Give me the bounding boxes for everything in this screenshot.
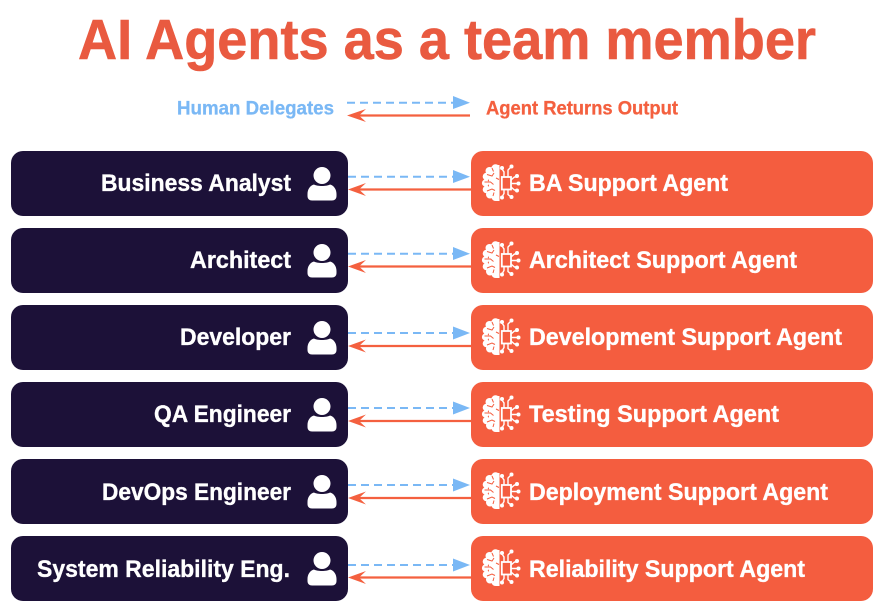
legend label: human delegates: Human Delegates — [177, 98, 334, 120]
icon: person — [308, 552, 336, 586]
legend arrow: delegate — [347, 96, 470, 109]
icon: person — [308, 244, 336, 278]
icon: person — [308, 475, 336, 508]
arrow: return — [348, 183, 471, 196]
row: devops engineer — [11, 459, 873, 524]
icon: AI brain — [482, 164, 520, 201]
arrow: return — [348, 260, 471, 273]
agent card: BA Support Agent — [529, 170, 728, 197]
row: business analyst — [11, 151, 873, 216]
arrow: return — [348, 571, 471, 584]
icon: person — [308, 167, 336, 200]
icon: person — [308, 321, 336, 354]
icon: AI brain — [482, 549, 520, 586]
row: architect — [11, 228, 873, 293]
arrow: return — [348, 492, 471, 504]
human card — [11, 151, 348, 216]
agent card: Reliability Support Agent — [529, 556, 805, 583]
arrow: delegate — [348, 402, 470, 414]
title: AI Agents as a team member — [78, 8, 816, 72]
icon: person — [308, 398, 336, 432]
human card — [11, 459, 348, 524]
human card — [11, 228, 348, 293]
human card: Business Analyst — [101, 170, 291, 197]
human card: Architect — [190, 247, 291, 274]
agent card — [471, 459, 873, 524]
human card — [11, 382, 348, 447]
agent card — [471, 228, 873, 293]
arrow: delegate — [348, 170, 470, 183]
legend arrow: return — [347, 109, 470, 122]
human card — [11, 536, 348, 601]
agent card: Testing Support Agent — [529, 401, 779, 428]
icon: AI brain — [482, 472, 520, 509]
agent card: Development Support Agent — [529, 324, 842, 351]
arrow: delegate — [348, 478, 470, 492]
row: developer — [11, 305, 873, 370]
human card: Developer — [180, 324, 291, 351]
agent card: Architect Support Agent — [529, 247, 797, 274]
legend label: agent returns output: Agent Returns Output — [486, 98, 678, 120]
icon: AI brain — [482, 241, 520, 278]
legend — [177, 96, 678, 122]
human card: System Reliability Eng. — [37, 556, 290, 583]
arrow: return — [348, 414, 471, 428]
icon: AI brain — [482, 318, 520, 355]
arrow: delegate — [348, 558, 470, 572]
human card: DevOps Engineer — [102, 479, 291, 506]
arrow: delegate — [348, 247, 470, 260]
arrow: return — [348, 340, 471, 352]
agent card — [471, 382, 873, 447]
row: system reliability engineer — [11, 536, 873, 601]
human card: QA Engineer — [154, 401, 291, 428]
human card — [11, 305, 348, 370]
agent card — [471, 151, 873, 216]
row: qa engineer — [11, 382, 873, 447]
arrow: delegate — [348, 326, 470, 340]
agent card — [471, 305, 873, 370]
icon: AI brain — [482, 395, 520, 432]
agent card — [471, 536, 873, 601]
agent card: Deployment Support Agent — [529, 479, 828, 506]
